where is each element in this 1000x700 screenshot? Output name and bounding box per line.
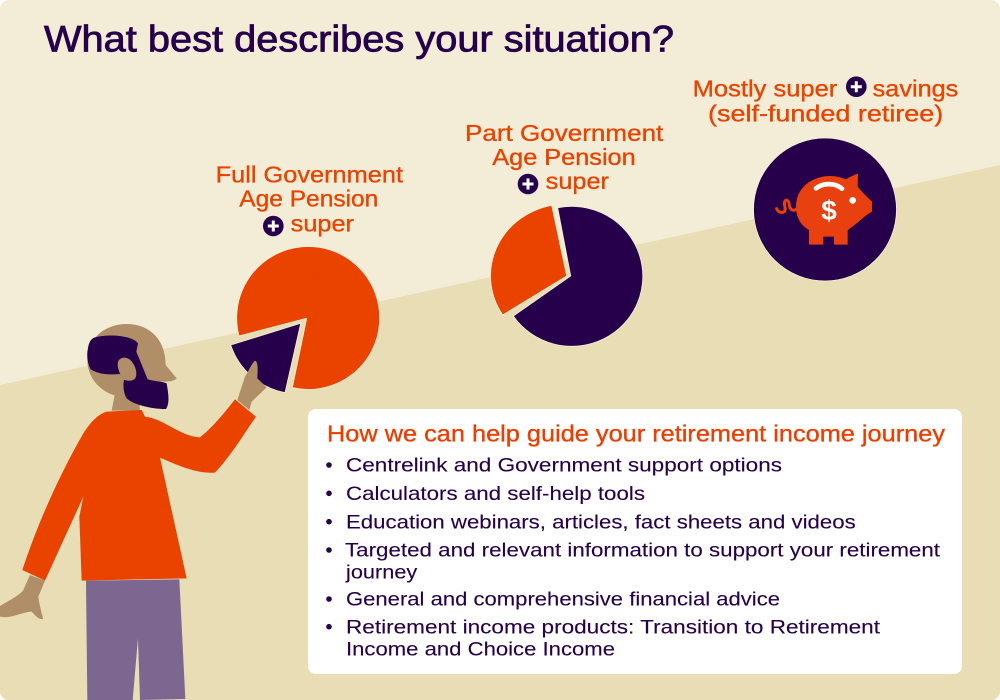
title: What best describes your situation? — [44, 19, 674, 60]
pie chart: full pension, wedge pulled out — [231, 246, 380, 393]
bullet list — [326, 455, 941, 661]
bullet list: General and comprehensive financial advice — [346, 589, 780, 611]
bullet list: Targeted and relevant information to support your retirement — [345, 540, 941, 562]
bullet list: Calculators and self-help tools — [346, 483, 645, 505]
right hand — [237, 361, 267, 410]
trousers — [86, 579, 185, 700]
person reaching for pie wedge — [0, 324, 267, 700]
option label: part government age pension plus super: Part Government — [465, 120, 664, 146]
pie chart: part pension — [491, 205, 643, 346]
bullet list: Education webinars, articles, fact sheets and videos — [346, 511, 856, 533]
hair and beard — [87, 335, 168, 409]
option label: full government age pension plus super — [216, 161, 404, 237]
option label: mostly super plus savings, self-funded retiree: savings — [873, 76, 958, 102]
neck — [112, 393, 140, 411]
icon: piggy bank in dark circle: $ — [821, 195, 837, 226]
bullet list: Retirement income products: Transition to Retirement — [346, 616, 881, 638]
option label: part government age pension plus super — [465, 120, 664, 194]
bullet list: Centrelink and Government support options — [346, 455, 782, 477]
option label: full government age pension plus super: super — [291, 211, 354, 237]
option label: full government age pension plus super: Age Pension — [239, 186, 378, 212]
option label: full government age pension plus super: Full Government — [216, 161, 404, 187]
bullet list: journey — [345, 561, 418, 583]
card heading: How we can help guide your retirement income journey — [327, 421, 945, 447]
head — [87, 324, 177, 397]
icon: piggy bank in dark circle — [754, 138, 896, 281]
left hand — [0, 575, 45, 619]
option label: mostly super plus savings, self-funded retiree: (self-funded retiree) — [708, 101, 943, 127]
option label: mostly super plus savings, self-funded retiree: Mostly super — [693, 76, 837, 102]
option label: mostly super plus savings, self-funded retiree — [693, 76, 958, 127]
ear — [118, 358, 136, 381]
bullet list: Income and Choice Income — [346, 639, 615, 661]
white card: how we can help — [308, 409, 962, 674]
option label: part government age pension plus super: Age Pension — [492, 144, 636, 170]
option label: part government age pension plus super: super — [546, 168, 609, 194]
orange jumper — [22, 399, 256, 581]
